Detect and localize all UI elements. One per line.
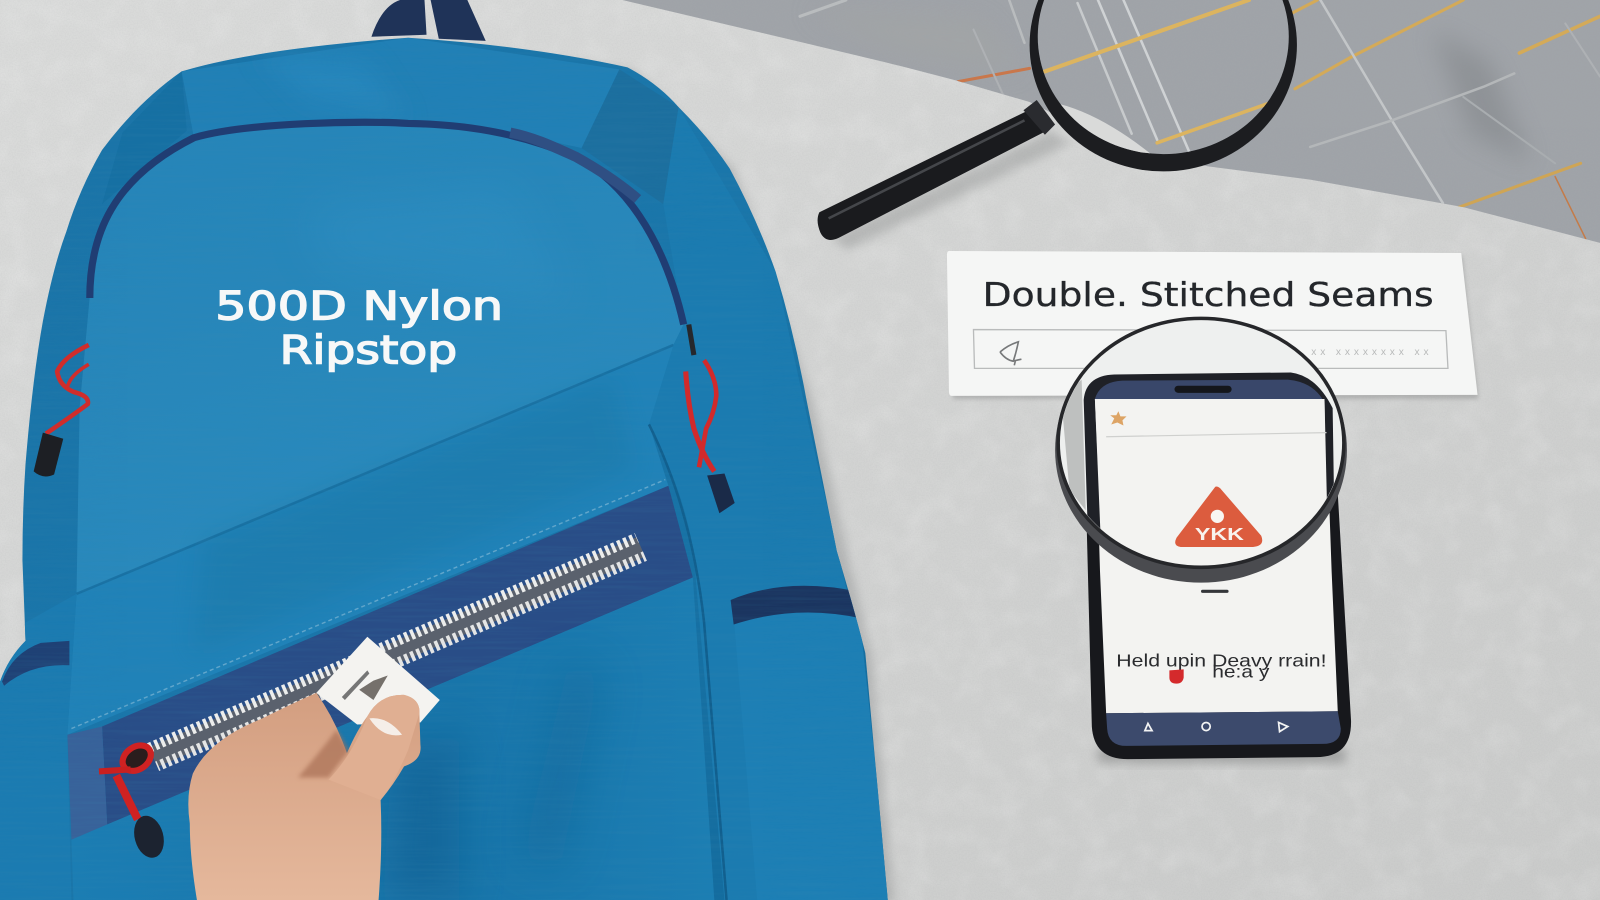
fabric streak texture: [786, 598, 820, 600]
backpack: [0, 0, 898, 900]
magnified phone header: [1095, 380, 1322, 399]
heading: 500D Nylon Ripstop: 500D Nylon: [215, 284, 503, 329]
upper zipper seam: [90, 122, 684, 324]
side pocket band: [731, 586, 861, 624]
magnified phone screen: [1094, 399, 1327, 529]
home indicator: [1201, 590, 1229, 593]
bottom zipper pull: [99, 740, 168, 861]
topstitch line: [71, 480, 665, 729]
magnified divider: [1106, 433, 1327, 437]
icon: red drop: [1169, 669, 1184, 684]
side pocket: [850, 594, 888, 900]
icon: pen sketch: [1000, 342, 1021, 365]
top panel shading: [182, 38, 619, 148]
front panel: [77, 122, 684, 594]
hand: [188, 693, 421, 900]
left zipper pull: [34, 345, 89, 476]
zipper teeth: [149, 538, 645, 766]
phone screen: [1095, 399, 1338, 713]
left pocket band: [2, 641, 69, 686]
loupe rim: [1058, 318, 1344, 567]
heading: 500D Nylon Ripstop: [215, 284, 503, 373]
right side strap panel: [650, 107, 846, 900]
heading: 500D Nylon Ripstop: Ripstop: [280, 328, 457, 373]
magnifying glass: [818, 0, 1298, 250]
card: double stitched seams: [947, 251, 1479, 399]
tape left end: [67, 727, 107, 840]
phone nav bar: [1106, 711, 1341, 746]
magnified speaker: [1174, 386, 1232, 393]
plaid fabric: [622, 0, 1600, 245]
mid panel: [67, 345, 684, 735]
faint card note: xx xxxxxxxx xx: [1311, 347, 1429, 358]
magnifier handle: [818, 100, 1055, 240]
nav icons: [1145, 722, 1288, 732]
right zipper pull: [686, 324, 735, 513]
loupe over phone: [1055, 317, 1347, 583]
phone message second line: he:a y: [1212, 662, 1270, 682]
glass side reflection: [1061, 380, 1086, 510]
pocket zip tape: [102, 486, 693, 824]
backpack body: [0, 38, 888, 900]
card inner outline: [973, 330, 1448, 368]
magnifier rim: [1030, 0, 1297, 171]
icon: magnified star: [1110, 411, 1127, 426]
lower pocket: [71, 578, 714, 900]
backpack top handle: [371, 0, 486, 41]
tag held in fingers: [316, 637, 440, 724]
phone message text: Held upin Deavy rrain!: [1116, 650, 1327, 670]
left side: [0, 624, 70, 900]
smartphone: [1084, 373, 1351, 763]
card heading: Double. Stitched Seams: [983, 275, 1434, 314]
magnified phone frame: [1084, 372, 1334, 529]
magnifier lens view: [1038, 0, 1289, 154]
icon: magnified YKK badge: YKK: [1195, 524, 1245, 544]
icon: magnified YKK badge: [1175, 487, 1262, 547]
